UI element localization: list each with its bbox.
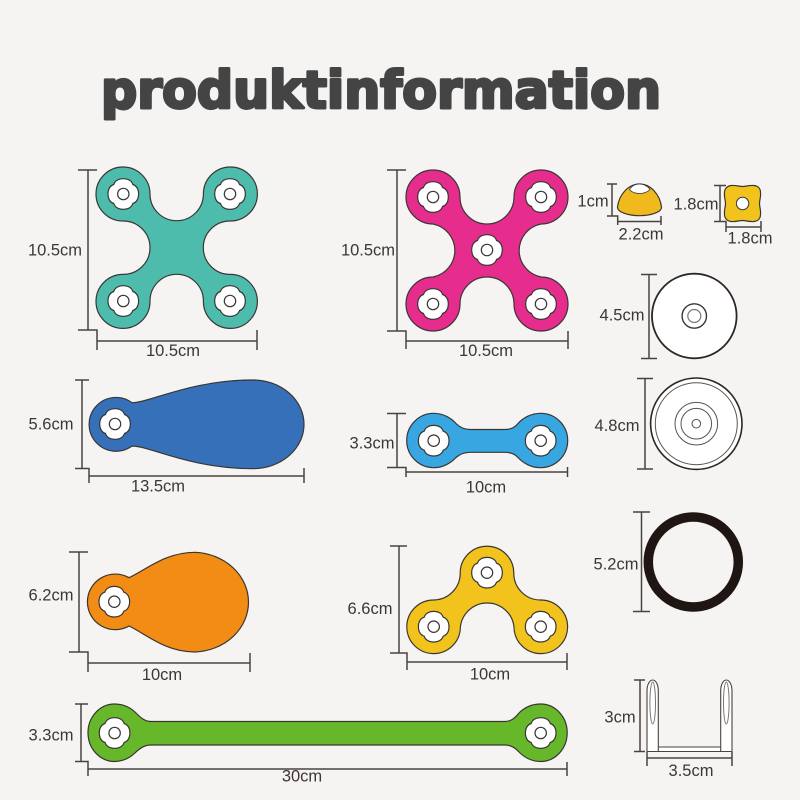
part: dark blue paddle: 13.5cm [131, 478, 185, 496]
part: teal X connector: 10.5cm [28, 242, 82, 260]
part: pink X connector: 10.5cm [341, 242, 395, 260]
part: pink X connector [341, 170, 568, 360]
part: white disc 4.8cm [595, 378, 742, 469]
part: yellow dome cap: 2.2cm [619, 226, 663, 244]
part: yellow arch [348, 546, 568, 684]
part: dark blue paddle: 5.6cm [29, 416, 73, 434]
part: yellow flower bead: 1.8cm [728, 230, 772, 248]
part: orange paddle [29, 552, 250, 684]
part: white disc 4.8cm: 4.8cm [595, 417, 639, 435]
part: yellow arch: 6.6cm [348, 600, 392, 618]
part: long green bar: 30cm [282, 768, 322, 786]
part: teal X connector [28, 167, 257, 360]
part: yellow dome cap: 1cm [577, 192, 609, 210]
title: produktinformation [101, 61, 661, 121]
part: white U clip: 3.5cm [669, 762, 713, 780]
part: light blue short bar [350, 413, 568, 496]
part: orange paddle: 6.2cm [29, 586, 73, 604]
part: light blue short bar: 3.3cm [350, 434, 394, 452]
part: teal X connector: 10.5cm [146, 342, 200, 360]
part: white U clip: 3cm [604, 708, 636, 726]
part: pink X connector: 10.5cm [459, 342, 513, 360]
part: black ring: 5.2cm [594, 556, 638, 574]
part: white U clip [604, 680, 732, 780]
part: light blue short bar: 10cm [466, 478, 506, 496]
part: yellow flower bead: 1.8cm [674, 196, 718, 214]
part: orange paddle: 10cm [142, 666, 182, 684]
part: dark blue paddle [29, 380, 304, 496]
part: yellow flower bead [674, 185, 772, 248]
part: white disc 4.5cm: 4.5cm [600, 306, 644, 324]
part: long green bar [29, 704, 567, 786]
part: black ring [594, 512, 738, 612]
part: yellow arch: 10cm [470, 666, 510, 684]
part: white disc 4.5cm [600, 274, 737, 358]
part: yellow dome cap [577, 184, 663, 244]
part: long green bar: 3.3cm [29, 726, 73, 744]
